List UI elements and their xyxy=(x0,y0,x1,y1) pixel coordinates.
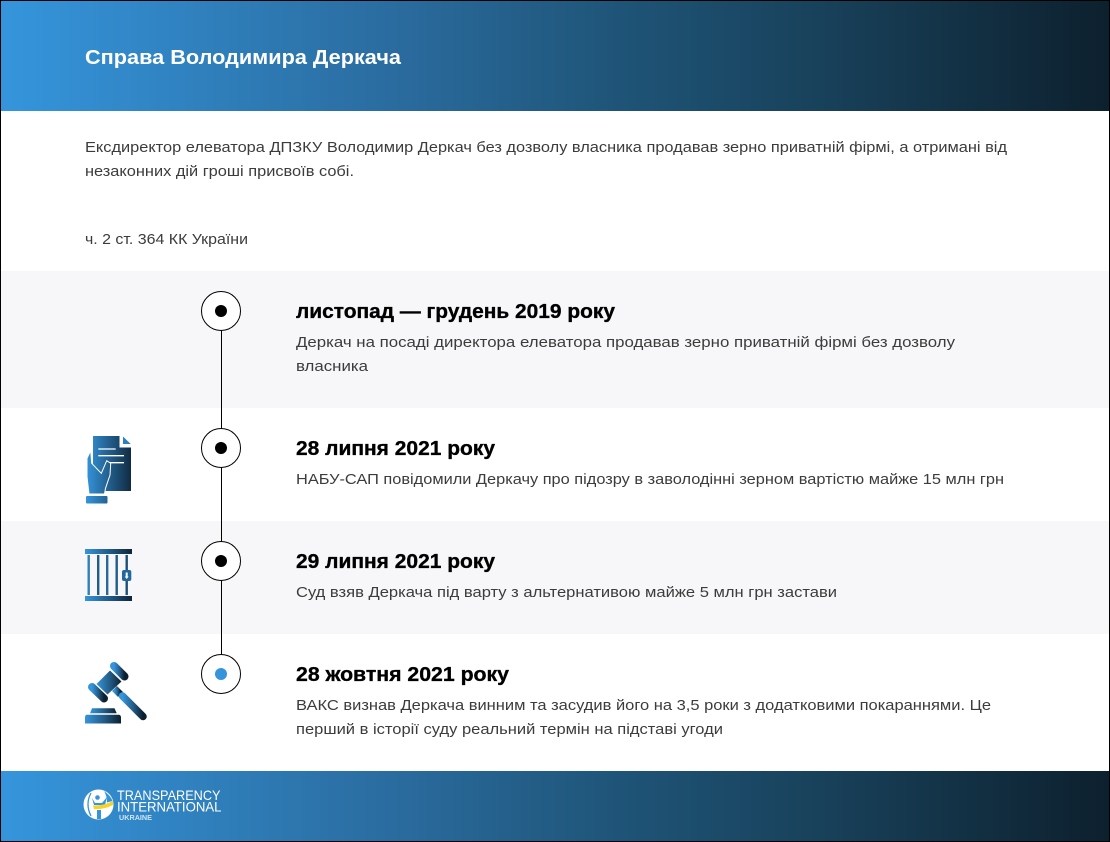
event 3: Суд взяв Деркача під варту з альтернативою майже 5 млн грн застави xyxy=(296,584,837,601)
timeline marker 3 xyxy=(202,542,240,580)
event 2 xyxy=(296,437,1004,488)
timeline marker 1 xyxy=(202,292,240,330)
intro text xyxy=(85,139,1007,180)
event 1: власника xyxy=(296,358,369,375)
icon: prison bars xyxy=(85,549,132,601)
header band xyxy=(1,1,1109,111)
timeline row backgrounds xyxy=(1,271,1109,634)
logo: Transparency International Ukraine: INTERNATIONAL xyxy=(117,800,222,815)
event 1: листопад — грудень 2019 року xyxy=(296,300,616,323)
event 4: ВАКС визнав Деркача винним та засудив його на 3,5 роки з додатковими покараннями. Це xyxy=(296,697,991,714)
logo: Transparency International Ukraine: TRANSPARENCY xyxy=(117,788,220,803)
event 1: Деркач на посаді директора елеватора продавав зерно приватній фірмі без дозволу xyxy=(296,334,956,351)
event 2: НАБУ-САП повідомили Деркачу про підозру в заволодінні зерном вартістю майже 15 млн грн xyxy=(296,471,1004,488)
title: Справа Володимира Деркача xyxy=(85,46,402,69)
intro text: незаконних дій гроші присвоїв собі. xyxy=(85,163,354,180)
logo: Transparency International Ukraine: UKRAINE xyxy=(119,815,152,822)
legal reference: ч. 2 ст. 364 КК України xyxy=(85,231,248,248)
event 3 xyxy=(296,550,837,601)
footer band xyxy=(1,771,1109,841)
intro text: Ексдиректор елеватора ДПЗКУ Володимир Деркач без дозволу власника продавав зерно приватній фірмі, а отримані від xyxy=(85,139,1007,156)
icon: hand with document xyxy=(86,435,132,504)
event 1 xyxy=(296,300,956,375)
event 3: 29 липня 2021 року xyxy=(296,550,496,573)
event 2: 28 липня 2021 року xyxy=(296,437,496,460)
event 4 xyxy=(296,663,991,738)
timeline marker 4 xyxy=(202,654,240,694)
icon: gavel xyxy=(85,666,143,724)
event 4: перший в історії суду реальний термін на підставі угоди xyxy=(296,721,723,738)
event 4: 28 жовтня 2021 року xyxy=(296,663,510,686)
logo: Transparency International Ukraine xyxy=(84,788,222,822)
timeline marker 2 xyxy=(202,428,240,468)
timeline line xyxy=(221,311,222,674)
